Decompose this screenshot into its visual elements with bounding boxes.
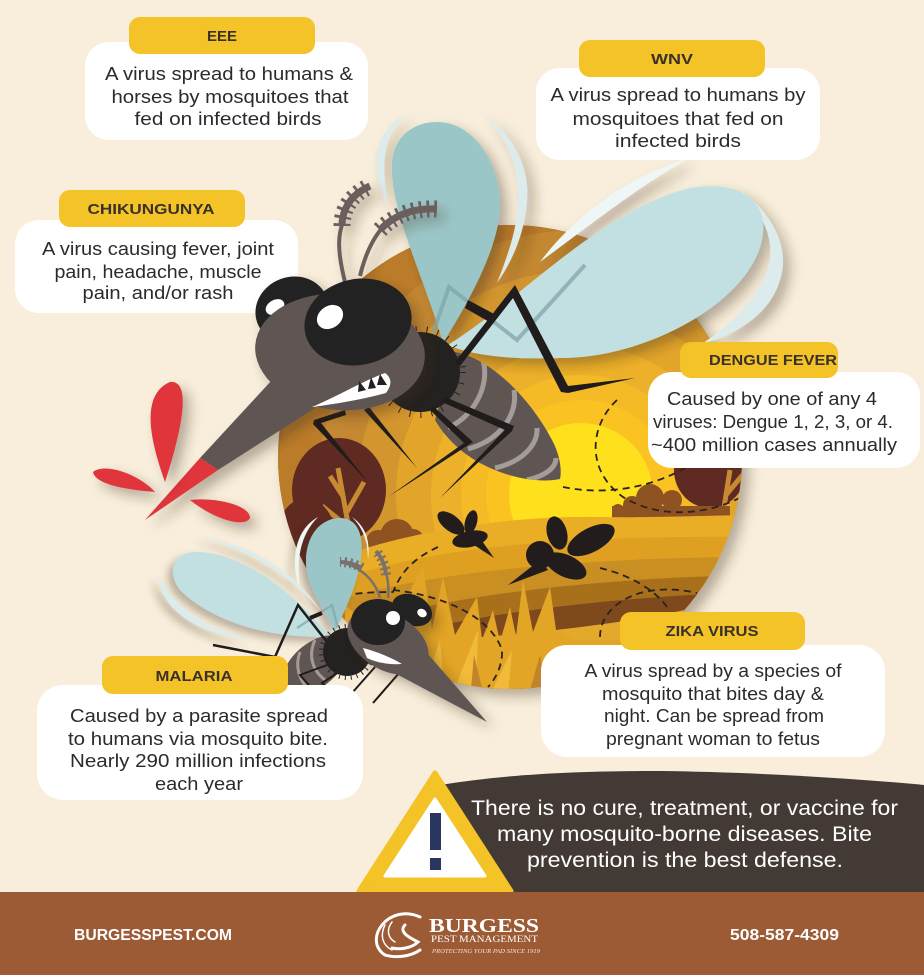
big mosquito thorax [377, 329, 463, 415]
callout: Dengue fever [648, 342, 920, 468]
callout: Malaria: MALARIA [156, 668, 233, 685]
warning message: many mosquito-borne diseases. Bite [497, 822, 872, 846]
big mosquito head [145, 266, 430, 520]
red blood drops [93, 382, 250, 522]
illustration: circular sunset landscape [278, 224, 756, 704]
callout: WNV: mosquitoes that fed on [572, 108, 784, 129]
callout: Malaria: Nearly 290 million infections [70, 750, 326, 771]
callout: Zika virus [541, 612, 885, 757]
grass [345, 578, 556, 689]
warning message: prevention is the best defense. [527, 848, 843, 872]
footer [0, 892, 924, 975]
silhouette mosquito 1 [438, 510, 494, 558]
hills [345, 515, 734, 689]
small mosquito wings [158, 517, 369, 640]
callout: WNV: infected birds [615, 130, 741, 151]
callout: EEE: horses by mosquitoes that [112, 86, 348, 107]
big mosquito [145, 113, 783, 520]
callout: Zika virus: night. Can be spread from [604, 705, 824, 726]
callout: Chikungunya: A virus causing fever, joint [42, 238, 274, 259]
callout: Chikungunya: CHIKUNGUNYA [88, 201, 215, 218]
small mosquito [158, 517, 487, 722]
website: BURGESSPEST.COM [74, 927, 232, 944]
big mosquito abdomen [435, 352, 561, 480]
logo: PEST MANAGEMENT [431, 935, 538, 945]
small mosquito head [336, 588, 487, 722]
small mosquito abdomen [288, 635, 336, 685]
silhouette mosquito 2 [508, 514, 620, 585]
small mosquito thorax [321, 626, 373, 678]
small mosquito legs [213, 605, 400, 703]
callout: Zika virus: ZIKA VIRUS [666, 623, 758, 640]
logo: BURGESS [429, 915, 539, 937]
callout: Malaria: Caused by a parasite spread [70, 705, 328, 726]
icon: warning triangle [359, 773, 511, 891]
callout: Malaria: each year [155, 773, 243, 794]
callout: EEE: A virus spread to humans & [105, 63, 354, 84]
callout: Chikungunya: pain, and/or rash [82, 282, 234, 303]
flight paths [340, 400, 745, 687]
logo: PROTECTING YOUR PAD SINCE 1919 [431, 949, 540, 955]
callout: WNV: A virus spread to humans by [550, 84, 806, 105]
callout: EEE: EEE [207, 28, 237, 45]
bushes [366, 484, 730, 554]
big mosquito wings [377, 113, 783, 358]
callout: EEE: fed on infected birds [134, 108, 322, 129]
warning banner [440, 771, 924, 892]
warning message: There is no cure, treatment, or vaccine for [471, 796, 898, 820]
phone: 508-587-4309 [730, 927, 839, 944]
callout: WNV [536, 40, 820, 160]
callout: EEE [85, 17, 368, 140]
tree right [674, 468, 742, 506]
callout: Malaria [37, 656, 363, 800]
small mosquito antennae [340, 551, 388, 598]
big mosquito antennae [339, 186, 437, 282]
callout: Dengue fever: Caused by one of any 4 [667, 388, 877, 409]
callout: Zika virus: pregnant woman to fetus [606, 728, 820, 749]
callout: Zika virus: mosquito that bites day & [602, 683, 825, 704]
tree left [284, 438, 386, 568]
callout: Dengue fever: DENGUE FEVER [709, 352, 837, 369]
callout: Zika virus: A virus spread by a species of [584, 660, 842, 681]
callout: Chikungunya [15, 190, 298, 313]
big mosquito legs [313, 285, 635, 498]
logo [376, 914, 540, 957]
callout: Chikungunya: pain, headache, muscle [54, 261, 262, 282]
callout: Malaria: to humans via mosquito bite. [68, 728, 328, 749]
callout: Dengue fever: ~400 million cases annually [651, 434, 898, 455]
callout: Dengue fever: viruses: Dengue 1, 2, 3, or 4. [653, 411, 893, 432]
warning message [471, 796, 898, 872]
callout: WNV: WNV [651, 51, 693, 68]
